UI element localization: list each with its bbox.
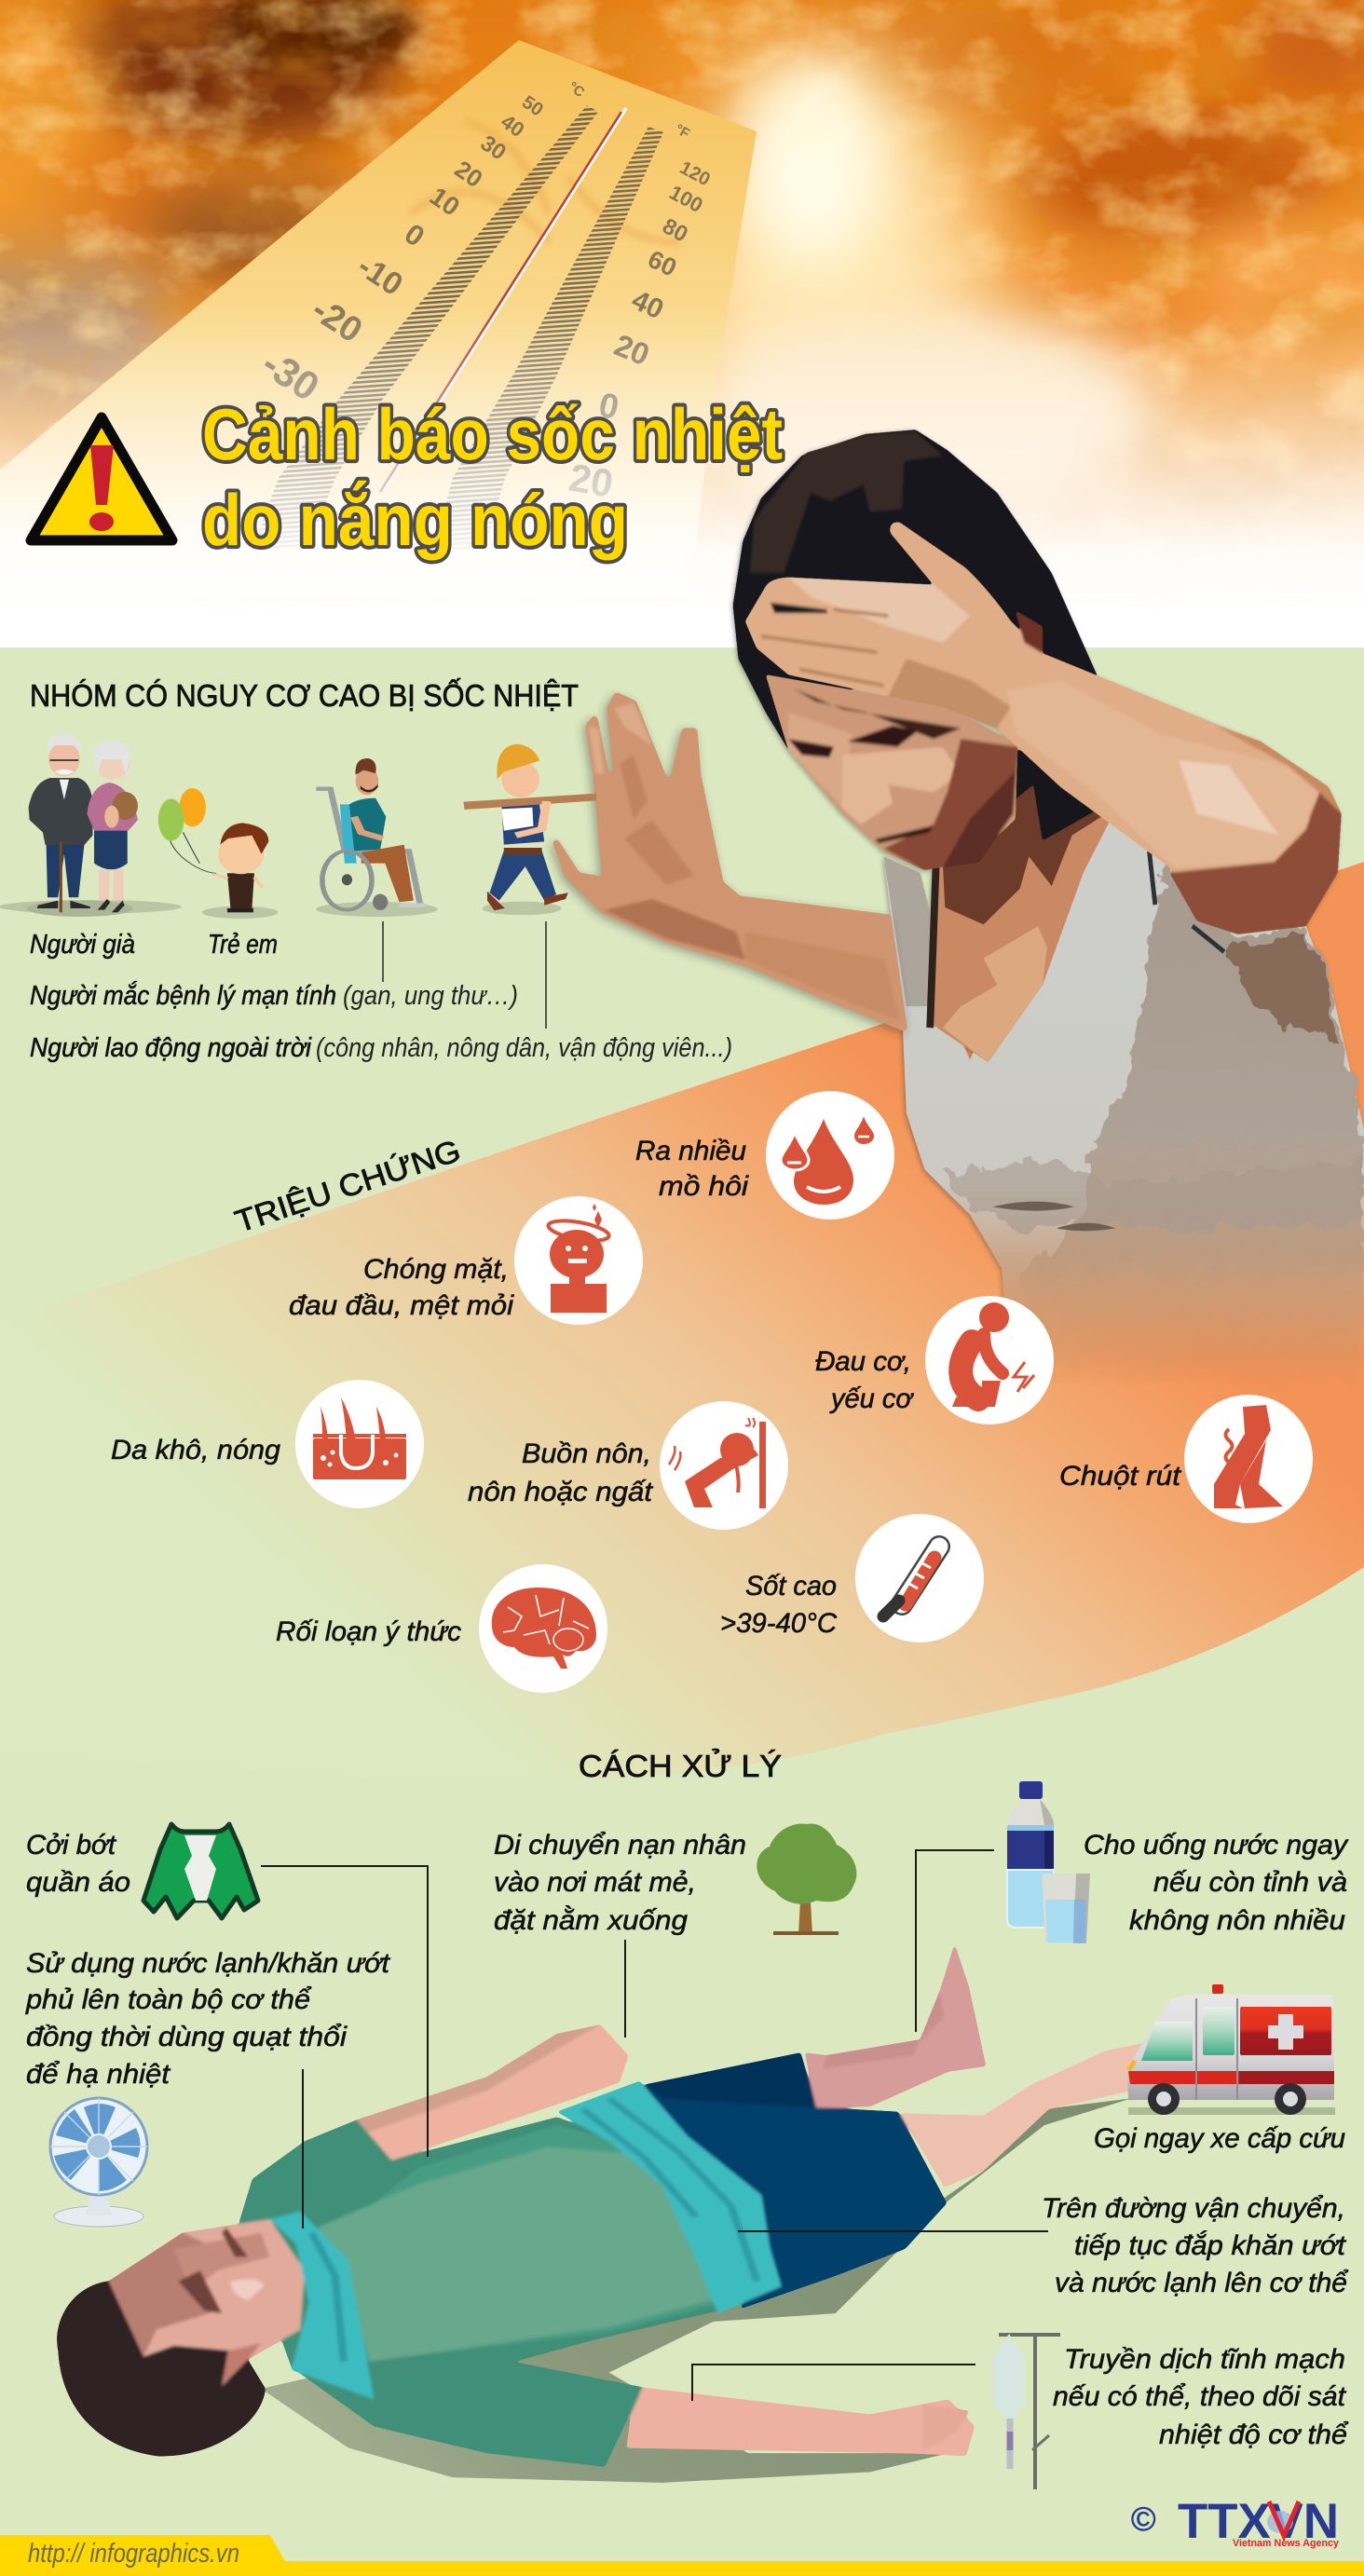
person in wheelchair — [316, 758, 426, 910]
treatment label: IV and monitoring: nếu có thể, theo dõi sát — [1053, 2381, 1347, 2412]
section heading: risk groups: NHÓM CÓ NGUY CƠ CAO BỊ SỐC NHIỆT — [30, 677, 579, 713]
treatment label: remove clothes — [26, 1830, 130, 1898]
thermometer: 100 — [665, 181, 707, 217]
label: dry skin: Da khô, nóng — [111, 1435, 280, 1465]
icon: fan — [50, 2098, 147, 2227]
treatment label: during transport: tiếp tục đắp khăn ướt — [1074, 2230, 1347, 2261]
treatment label: IV and monitoring: nhiệt độ cơ thể — [1159, 2419, 1348, 2450]
thermometer: 20 — [566, 456, 617, 506]
treatment leader lines — [261, 1850, 1048, 2401]
sky fade into white — [0, 307, 1364, 615]
patient: bent leg — [805, 1944, 986, 2107]
thermometer: 80 — [658, 213, 692, 248]
sky photo with sun — [0, 0, 1364, 615]
patient: body — [57, 1944, 1149, 2467]
yellow footer bar — [0, 2535, 1364, 2576]
treatment label: move to cool place: Di chuyển nạn nhân — [494, 1830, 746, 1860]
thermometer: °F — [672, 121, 692, 142]
construction worker — [463, 744, 596, 910]
woman: chest and neck — [929, 755, 1224, 1062]
thermometer: 40 — [627, 284, 668, 325]
patient: straight leg — [901, 2042, 1149, 2188]
thermometer: 120 — [676, 157, 714, 190]
label: confused consciousness: Rối loạn ý thức — [276, 1616, 461, 1647]
risk group labels: Người mắc bệnh lý mạn tính — [30, 980, 336, 1011]
symptom: confused consciousness — [479, 1564, 607, 1693]
patient: face — [109, 2219, 305, 2386]
treatment label: call ambulance: Gọi ngay xe cấp cứu — [1094, 2123, 1345, 2154]
label: cramps: Chuột rút — [1059, 1461, 1182, 1492]
patient: ground shadow — [261, 2098, 1131, 2483]
icon: clothes — [143, 1824, 258, 1918]
risk group labels: (công nhân, nông dân, vận động viên...) — [316, 1033, 732, 1063]
label: dizziness: đau đầu, mệt mỏi — [289, 1290, 514, 1321]
thermometer: 0 — [595, 386, 622, 427]
risk group labels: Trẻ em — [208, 930, 278, 960]
label: sweating: mồ hôi — [659, 1171, 749, 1202]
thermometer: °C — [566, 79, 587, 101]
thermometer — [0, 40, 757, 596]
treatment label: give water: nếu còn tỉnh và — [1153, 1867, 1347, 1898]
treatment label: remove clothes: quần áo — [26, 1867, 130, 1898]
symptom: dizziness — [514, 1196, 643, 1325]
treatment label: move to cool place: vào nơi mát mẻ, — [494, 1867, 696, 1898]
child with balloons — [158, 788, 268, 912]
TTXVN logo: TTXVN — [1178, 2494, 1339, 2549]
elderly couple — [29, 734, 138, 912]
thermometer: 20 — [450, 155, 488, 193]
label: dizziness: Chóng mặt, — [363, 1254, 509, 1285]
woman: shirt — [883, 813, 1364, 1383]
treatment label: give water — [1084, 1830, 1349, 1936]
orange symptoms band — [0, 862, 1364, 1782]
thermometer: 40 — [497, 110, 528, 142]
TTXVN logo: © — [1131, 2500, 1156, 2538]
thermometer: -30 — [253, 341, 327, 410]
icon: IV drip — [993, 2334, 1060, 2489]
symptom: sweating — [766, 1091, 894, 1220]
patient: neck towel — [270, 2212, 375, 2399]
patient: shorts — [644, 2052, 947, 2310]
label: high fever: >39-40°C — [720, 1608, 837, 1639]
label: muscle pain: yếu cơ — [829, 1383, 915, 1414]
treatment label: give water: không nôn nhiều — [1129, 1905, 1345, 1936]
icon: water bottle and glass — [1007, 1781, 1090, 1943]
risk group labels: (gan, ung thư…) — [343, 981, 518, 1011]
TTXVN logo: Vietnam News Agency — [1233, 2538, 1340, 2549]
patient: raised arm — [357, 2024, 628, 2160]
treatment label: move to cool place — [494, 1830, 746, 1936]
title: Cảnh báo sốc nhiệt — [202, 393, 783, 475]
thermometer: 0 — [399, 217, 430, 253]
label: nausea: Buồn nôn, — [522, 1438, 651, 1469]
woman: face — [766, 675, 1017, 870]
label: dizziness — [289, 1254, 514, 1321]
symptom: high fever — [855, 1514, 984, 1642]
thermometer: 10 — [425, 182, 465, 222]
risk group illustrations — [0, 734, 596, 919]
label: muscle pain — [815, 1346, 915, 1414]
symptom: cramps — [1184, 1395, 1313, 1523]
label: nausea — [468, 1438, 654, 1507]
treatment label: cold towel and fan: phủ lên toàn bộ cơ thể — [25, 1984, 311, 2015]
thermometer: 30 — [476, 130, 511, 166]
lying patient illustration — [57, 1944, 1149, 2483]
treatment label: cold towel and fan: Sử dụng nước lạnh/khăn ướt — [26, 1948, 391, 1979]
treatment label: move to cool place: đặt nằm xuống — [494, 1905, 688, 1936]
treatment label: cold towel and fan: để hạ nhiệt — [26, 2059, 171, 2090]
treatment label: during transport — [1042, 2193, 1348, 2298]
woman with heat stroke — [733, 429, 1364, 1383]
thermometer: -10 — [351, 248, 409, 303]
treatment label: give water: Cho uống nước ngay — [1084, 1830, 1349, 1860]
icon: tree — [757, 1824, 856, 1935]
thermometer: 50 — [518, 92, 547, 120]
patient: waist towel — [557, 2081, 782, 2313]
treatment label: cold towel and fan: đồng thời dùng quạt thổi — [26, 2022, 348, 2052]
patient: lower arm — [626, 2388, 975, 2456]
treatment label: cold towel and fan — [25, 1948, 391, 2090]
footer url: http:// infographics.vn — [28, 2539, 239, 2569]
thermometer: -20 — [305, 290, 369, 351]
patient: hair — [57, 2282, 266, 2456]
risk group labels: Người già — [30, 930, 135, 960]
treatment label: during transport: Trên đường vận chuyển, — [1042, 2193, 1345, 2224]
warning triangle icon — [31, 417, 172, 540]
treatment label: during transport: và nước lạnh lên cơ thể — [1055, 2268, 1348, 2298]
section heading: symptoms: TRIỆU CHỨNG — [231, 1133, 465, 1239]
symptom: muscle pain — [925, 1296, 1054, 1424]
patient: shirt — [239, 2118, 766, 2467]
risk group labels: Người lao động ngoài trời — [30, 1033, 312, 1063]
label: muscle pain: Đau cơ, — [815, 1346, 911, 1377]
treatment label: IV and monitoring: Truyền dịch tĩnh mạch — [1064, 2344, 1345, 2375]
woman: raised hand and forearm — [745, 523, 1342, 934]
section heading: treatment: CÁCH XỬ LÝ — [579, 1749, 782, 1783]
label: sweating: Ra nhiều — [635, 1136, 746, 1166]
label: high fever: Sốt cao — [745, 1571, 837, 1601]
label: high fever — [720, 1571, 837, 1639]
woman: hair — [733, 429, 1099, 840]
thermometer: 60 — [644, 245, 681, 282]
title — [202, 393, 783, 561]
title: do nắng nóng — [202, 479, 628, 561]
label: nausea: nôn hoặc ngất — [468, 1477, 654, 1507]
icon: ambulance — [1127, 1984, 1335, 2115]
risk group labels — [30, 930, 732, 1063]
ground shadows — [0, 900, 562, 919]
treatment label: remove clothes: Cởi bớt — [26, 1830, 117, 1860]
woman: left arm and palm against wall — [556, 696, 904, 1028]
thermometer: 20 — [609, 327, 654, 372]
treatment label: IV and monitoring — [1053, 2344, 1348, 2450]
symptom: dry skin — [295, 1380, 424, 1508]
label: sweating — [635, 1136, 749, 1202]
symptom: nausea — [660, 1401, 788, 1530]
risk group leader lines — [383, 921, 546, 1029]
